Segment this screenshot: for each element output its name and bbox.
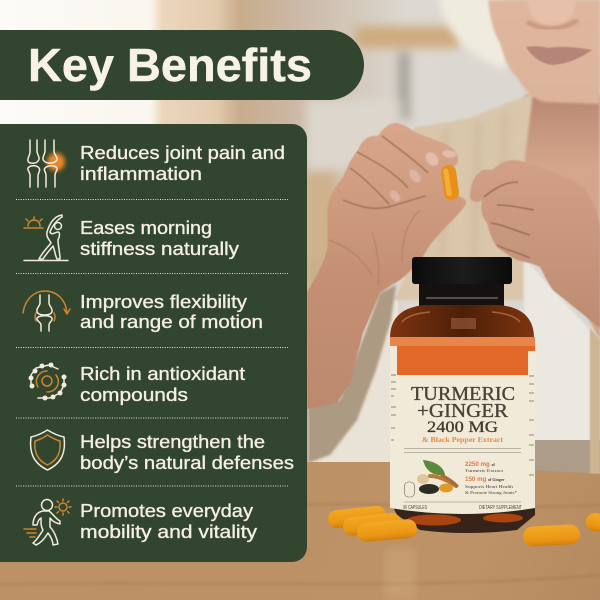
glass shoulder [390,305,534,338]
benefit 5: natural defenses [31,430,294,473]
supplement bottle: 2400 MG [427,419,498,436]
wall right of bottle [530,440,600,476]
benefit 3: flexibility: and range of motion [80,311,263,332]
orange band [390,337,535,375]
icon: knee joints with glow [28,140,65,187]
benefit text: Promotes everyday [80,500,254,521]
product name: TURMERIC [411,383,515,405]
wall behind arm [308,300,398,465]
neck [419,282,504,310]
benefit text: Helps strengthen the [80,431,265,452]
capsule held between fingers [440,164,460,201]
bottle base [392,505,535,533]
supplement bottle: 2250 mg of [465,461,495,468]
label body [390,375,535,514]
benefit text: Reduces joint pain and [80,142,285,163]
benefit 1: joint pain: inflammation [80,163,202,184]
second hand [470,160,600,328]
benefit 2: morning stiffness: stiffness naturally [80,238,240,259]
ingredient illustration [417,460,457,494]
benefit text: Rich in antioxidant [80,363,246,384]
capsules on table [327,505,600,547]
supplement bottle: 150 mg of Ginger [465,476,505,483]
icon: walking person with sun [24,499,71,545]
benefit text: Improves flexibility [80,291,248,312]
right sleeve [590,328,600,474]
neck [520,95,600,340]
left sleeve [308,285,396,463]
white shirt [524,258,590,442]
benefit 6: mobility and vitality [24,499,258,545]
benefit 2: morning stiffness [24,215,240,260]
benefit 4: antioxidants [28,362,246,405]
supplement bottle: DIETARY SUPPLEMENT [479,505,522,511]
panel: benefits list [0,124,307,562]
cap [412,257,512,284]
supplement bottle: Turmeric Extract [465,468,504,473]
benefit 6: mobility and vitality: mobility and vitality [80,521,258,542]
supplement bottle: & Promote Strong Joints* [465,490,517,495]
supplement bottle: Supports Heart Health [465,484,514,489]
icon: shield [31,430,64,470]
supplement bottle: 90 CAPSULES [403,505,427,511]
benefit 5: natural defenses: body’s natural defenses [80,452,294,473]
title: Key Benefits [28,39,312,91]
face [488,0,600,104]
benefit 3: flexibility [23,291,263,332]
benefit 4: antioxidants: compounds [80,384,188,405]
supplement bottle: & Black Pepper Extract [422,435,504,444]
hand holding capsule [307,123,466,409]
icon: knee with motion arc [23,291,70,331]
hair [438,0,510,70]
benefit text: Eases morning [80,217,212,238]
supplement bottle: +GINGER [417,400,509,422]
icon: stretching figure with sunrise [24,215,68,260]
title banner [0,30,364,100]
table [0,462,600,600]
icon: antioxidant molecule ring [28,362,66,400]
cardigan [395,93,533,300]
supplement bottle [390,257,535,533]
benefit 1: joint pain [28,140,285,187]
